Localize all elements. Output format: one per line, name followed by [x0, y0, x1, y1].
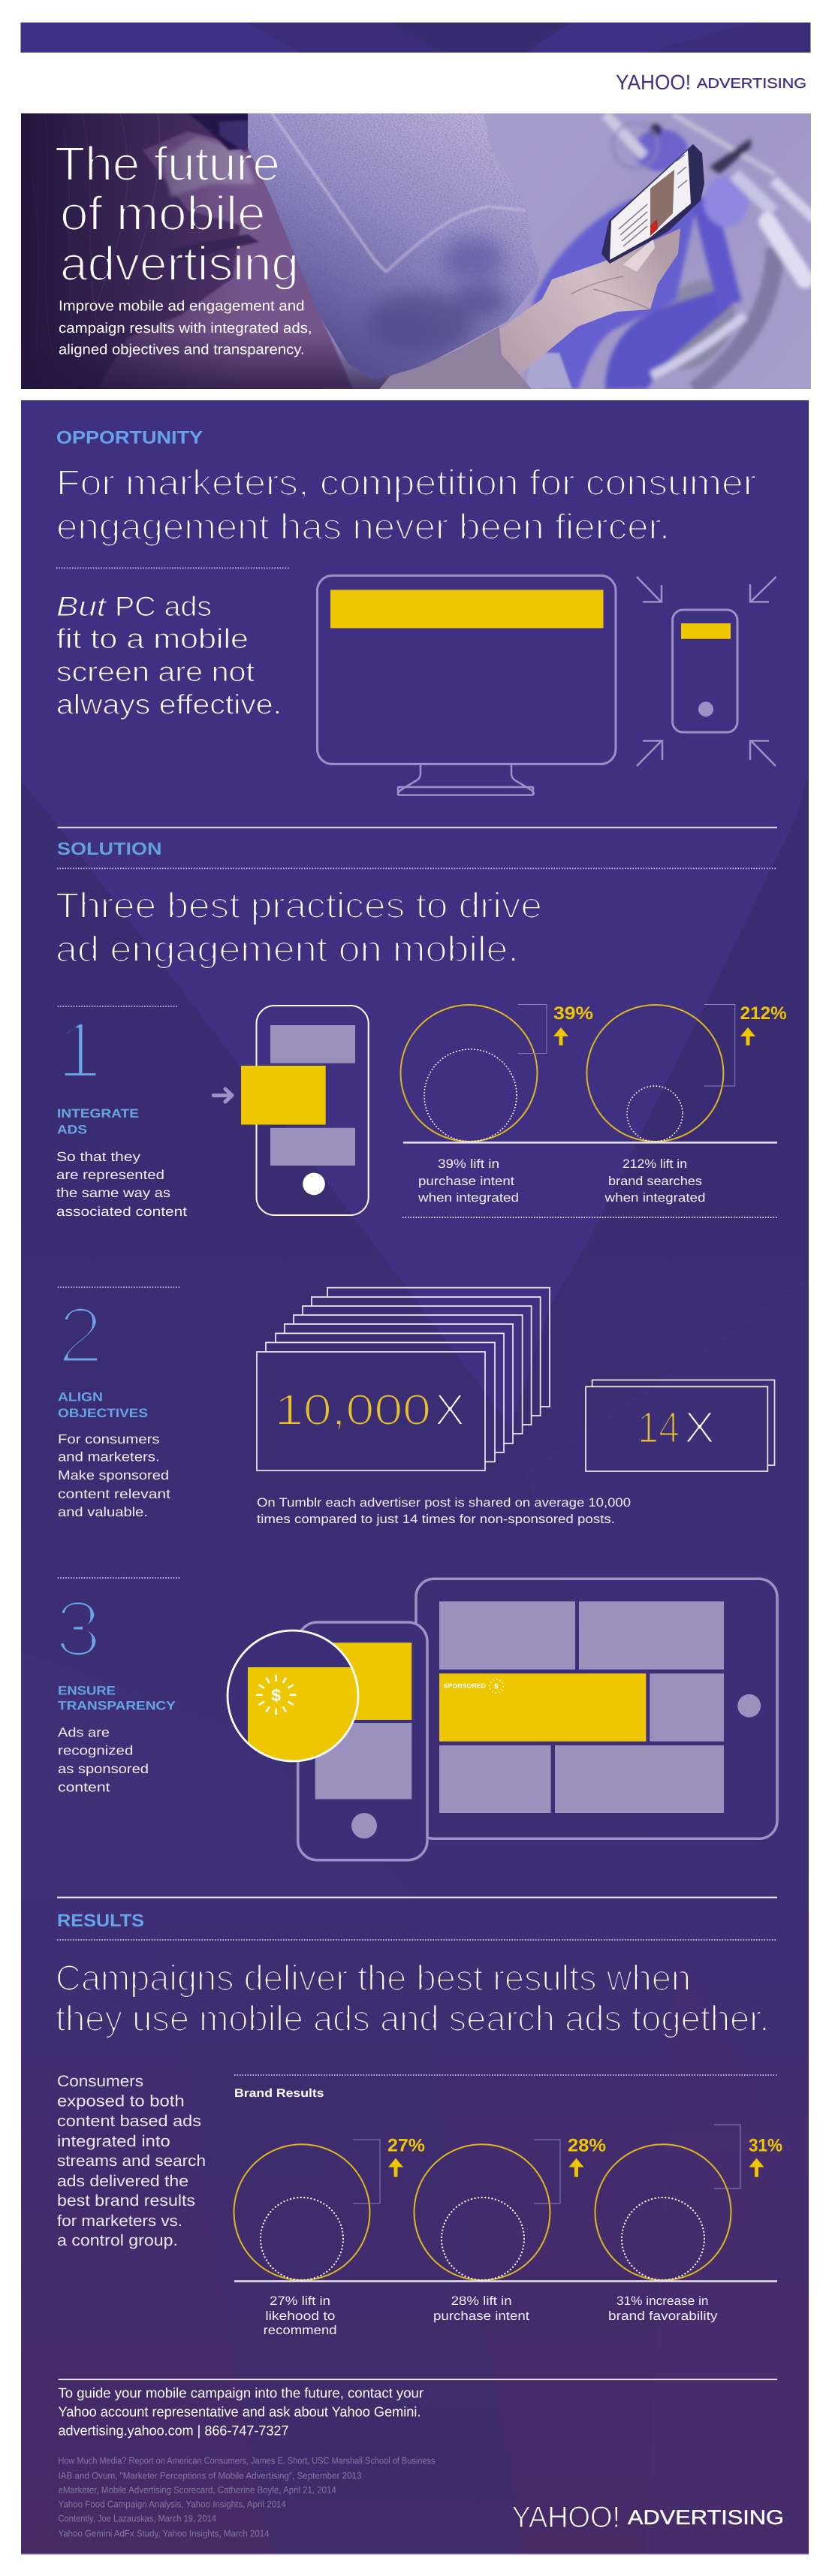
hero title: of mobile [60, 186, 266, 240]
hero title: advertising [60, 237, 299, 291]
logo: Yahoo Advertising footer: ADVERTISING [628, 2506, 784, 2529]
text: align description: content relevant [58, 1486, 170, 1501]
text: Tumblr stat: times compared to just 14 times for non-sponsored posts. [257, 1513, 615, 1526]
labels: results captions: 31% increase in [616, 2294, 709, 2308]
sources: eMarketer, Mobile Advertising Scorecard, Catherine Boyle, April 21, 2014 [59, 2485, 336, 2496]
icon: magnifier circle with dollar badge [228, 1630, 360, 1765]
text: consumers description [57, 2073, 206, 2249]
chart: 27% likelihood to recommend [234, 2136, 425, 2280]
heading: opportunity: OPPORTUNITY [56, 428, 203, 448]
text: PC ads not effective: always effective. [56, 689, 282, 720]
call to action [59, 2385, 424, 2439]
icon: phone with integrated ad [213, 1006, 369, 1215]
practice 2: align objectives [58, 1287, 774, 1526]
headline: three best practices: ad engagement on mobile. [56, 930, 519, 970]
text: consumers description: ads delivered the [57, 2173, 188, 2190]
text: integrate description: associated content [56, 1204, 187, 1219]
labels: lift captions: purchase intent [418, 1175, 514, 1188]
logo: Yahoo Advertising header [616, 71, 806, 94]
hero photo: person holding a phone beside a bike [21, 113, 815, 391]
logo: Yahoo Advertising header: YAHOO! [616, 71, 691, 94]
hand [499, 228, 680, 375]
subheading: integrate ads [57, 1107, 139, 1137]
icon: stack of shared posts, 10,000X: X [435, 1386, 465, 1434]
logo: Yahoo Advertising header: ADVERTISING [697, 75, 806, 91]
logo: Yahoo Advertising footer [512, 2501, 784, 2534]
sources: Yahoo Food Campaign Analysis, Yahoo Insights, April 2014 [59, 2499, 286, 2510]
labels: lift captions: brand searches [608, 1175, 702, 1188]
headline: competition [56, 463, 756, 547]
text: consumers description: for marketers vs. [57, 2213, 182, 2230]
heading: solution: SOLUTION [57, 839, 162, 858]
number 3: 3 [55, 1585, 101, 1673]
icon: magnifier circle with dollar badge: $ [271, 1685, 281, 1705]
chart: 27% likelihood to recommend: 27% [387, 2136, 425, 2156]
headline: campaigns deliver [56, 1959, 769, 2039]
labels: results captions: recommend [264, 2324, 337, 2337]
practice 3: ensure transparency [55, 1578, 777, 1860]
headline: three best practices [56, 886, 542, 970]
text: transparency description: as sponsored [58, 1761, 149, 1776]
text: PC ads not effective [56, 591, 282, 720]
chart: 212% lift in brand searches: 212% [740, 1003, 787, 1024]
sources: Contently, Joe Lazauskas, March 19, 2014 [59, 2514, 216, 2524]
hero subtitle: aligned objectives and transparency. [59, 342, 305, 357]
section: solution [56, 839, 777, 970]
text: transparency description: recognized [58, 1743, 133, 1758]
headline: competition: engagement has never been fiercer. [56, 508, 670, 547]
text: PC ads not effective: But [56, 591, 107, 622]
text: consumers description: content based ads [57, 2113, 201, 2130]
text: align description [58, 1431, 170, 1519]
text: align description: and valuable. [58, 1504, 148, 1519]
sleeve and cuff [526, 352, 572, 389]
text: PC ads not effective: fit to a mobile [56, 623, 249, 654]
icon: tablet with sponsored ad: $ [494, 1682, 499, 1691]
text: integrate description: are represented [56, 1167, 164, 1182]
headline: campaigns deliver: Campaigns deliver the best results when [56, 1959, 691, 1998]
subheading: ensure transparency: TRANSPARENCY [58, 1700, 176, 1713]
labels: lift captions [418, 1157, 706, 1205]
text: transparency description [58, 1725, 149, 1795]
text: align description: Make sponsored [58, 1467, 169, 1483]
labels: results captions: purchase intent [433, 2309, 529, 2323]
call to action: advertising.yahoo.com | 866-747-7327 [59, 2423, 288, 2439]
labels: results captions: 27% lift in [270, 2294, 330, 2308]
icon: tablet with sponsored ad [416, 1579, 777, 1838]
icon: stack of shared posts, 10,000X [257, 1288, 550, 1470]
section: opportunity [56, 428, 776, 795]
icon: desktop monitor with ad [317, 575, 616, 795]
number 2: 2 [58, 1291, 103, 1380]
labels: results captions: brand favorability [608, 2309, 718, 2323]
hero title: The future [55, 137, 280, 191]
subheading: integrate ads: INTEGRATE [57, 1107, 139, 1121]
labels: lift captions: when integrated [604, 1191, 706, 1205]
hero subtitle: campaign results with integrated ads, [59, 321, 312, 336]
text: consumers description: streams and search [57, 2152, 206, 2170]
text: align description: and marketers. [58, 1449, 160, 1464]
text: PC ads not effective: PC ads [115, 591, 212, 622]
chart: 39% lift in purchase intent [401, 1003, 593, 1142]
call to action: Yahoo account representative and ask about Yahoo Gemini. [59, 2404, 421, 2420]
text: consumers description: Consumers [57, 2073, 143, 2090]
icon: tablet with sponsored ad: SPONSORED [444, 1682, 486, 1690]
labels: lift captions: 212% lift in [623, 1157, 687, 1171]
hero subtitle: Improve mobile ad engagement and [59, 298, 305, 314]
practice 1: integrate ads [56, 1003, 787, 1219]
icon: two posts, 14X: X [684, 1404, 715, 1452]
labels: results captions [264, 2294, 718, 2337]
woman's jacket and hair [21, 113, 321, 389]
headline: campaigns deliver: they use mobile ads and search ads together. [56, 1999, 769, 2039]
subheading: integrate ads: ADS [57, 1124, 87, 1137]
icon: phone with ad [673, 610, 737, 732]
icon: two posts, 14X [586, 1380, 775, 1471]
text: integrate description: So that they [56, 1149, 140, 1164]
chart: 212% lift in brand searches [586, 1003, 787, 1142]
subheading: align objectives: OBJECTIVES [58, 1407, 148, 1420]
chart: 39% lift in purchase intent: 39% [553, 1003, 593, 1024]
sources [59, 2456, 436, 2539]
subheading: align objectives: ALIGN [58, 1391, 103, 1404]
logo: Yahoo Advertising footer: YAHOO! [512, 2501, 620, 2534]
text: consumers description: integrated into [57, 2133, 170, 2150]
subheading: ensure transparency [58, 1685, 176, 1713]
labels: results captions: likehood to [265, 2309, 335, 2323]
headline: three best practices: Three best practices to drive [56, 886, 542, 926]
text: transparency description: content [58, 1780, 110, 1795]
section: results [56, 1911, 782, 2337]
phone [601, 144, 704, 264]
sources: How Much Media? Report on American Consumers, James E. Short, USC Marshall School of Business [59, 2456, 436, 2466]
call to action: To guide your mobile campaign into the future, contact your [59, 2385, 424, 2401]
icon: shrinking arrows [637, 577, 776, 766]
top band [21, 23, 811, 53]
main panel background [21, 400, 809, 2555]
icon: two posts, 14X: 14 [638, 1404, 680, 1452]
labels: results captions: 28% lift in [451, 2294, 512, 2308]
icon: stack of shared posts, 10,000X: 10,000 [275, 1386, 431, 1434]
denim jacket [248, 113, 539, 379]
heading: brand results: Brand Results [234, 2087, 324, 2100]
hero title [55, 137, 299, 291]
chart: 31% brand favorability: 31% [749, 2136, 782, 2156]
text: align description: For consumers [58, 1431, 160, 1446]
sources: IAB and Ovum, "Marketer Perceptions of Mobile Advertising", September 2013 [59, 2471, 362, 2481]
text: transparency description: Ads are [58, 1725, 110, 1740]
text: Tumblr stat [257, 1496, 631, 1526]
hero subtitle [59, 298, 312, 357]
chart: 28% purchase intent [414, 2136, 606, 2280]
icon: phone [298, 1622, 427, 1860]
text: consumers description: exposed to both [57, 2093, 185, 2110]
text: integrate description [56, 1149, 187, 1219]
text: Tumblr stat: On Tumblr each advertiser post is shared on average 10,000 [257, 1496, 631, 1510]
chart: 31% brand favorability [595, 2125, 782, 2280]
sources: Yahoo Gemini AdFx Study, Yahoo Insights, March 2014 [59, 2529, 270, 2539]
text: consumers description: a control group. [57, 2232, 178, 2249]
subheading: align objectives [58, 1391, 148, 1420]
chart: 28% purchase intent: 28% [568, 2136, 606, 2156]
labels: lift captions: when integrated [418, 1191, 519, 1205]
text: consumers description: best brand results [57, 2192, 195, 2210]
subheading: ensure transparency: ENSURE [58, 1685, 116, 1698]
headline: competition: For marketers, competition for consumer [56, 463, 756, 503]
text: PC ads not effective: screen are not [56, 656, 255, 687]
heading: results: RESULTS [57, 1911, 144, 1930]
labels: lift captions: 39% lift in [438, 1157, 499, 1171]
text: integrate description: the same way as [56, 1185, 170, 1200]
number 1: 1 [57, 1006, 101, 1095]
